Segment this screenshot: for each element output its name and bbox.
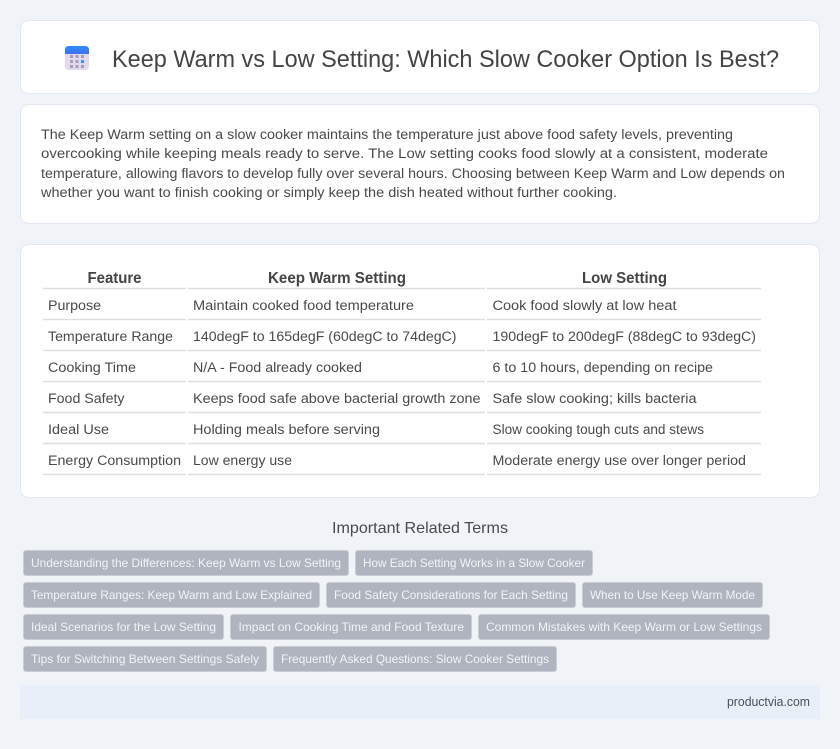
table row: cooking time: 6 to 10 hours, depending on recipe xyxy=(492,360,713,376)
tag: Temperature Ranges: Keep Warm and Low Explained xyxy=(31,588,312,602)
table row: purpose: Maintain cooked food temperature xyxy=(193,298,414,314)
tag: Food Safety Considerations for Each Setting xyxy=(334,588,568,602)
table header row: Low Setting xyxy=(582,270,667,287)
tag: Tips for Switching Between Settings Safely xyxy=(31,652,259,666)
tag xyxy=(274,646,556,672)
tag xyxy=(24,614,224,640)
tag xyxy=(582,582,762,608)
panel: title header xyxy=(20,20,820,94)
icon: calendar xyxy=(65,46,89,70)
table header row: Feature xyxy=(88,270,142,287)
table row: purpose xyxy=(48,298,677,314)
table row: cooking time: Cooking Time xyxy=(48,360,136,376)
table header row: Keep Warm Setting xyxy=(268,270,406,287)
table row: purpose: Purpose xyxy=(48,298,101,314)
tag xyxy=(230,614,472,640)
table row: ideal use xyxy=(48,422,704,438)
text block: introduction paragraph: temperature, allowing flavors to develop fully over several hours. Choosing between Keep Warm and Low depends on xyxy=(41,166,785,182)
table row: energy consumption: Low energy use xyxy=(193,453,292,469)
table row: ideal use: Slow cooking tough cuts and stews xyxy=(492,422,704,438)
table row: food safety xyxy=(48,391,697,407)
tag list: related terms xyxy=(24,550,770,672)
tag: How Each Setting Works in a Slow Cooker xyxy=(363,556,585,570)
title: Keep Warm vs Low Setting: Which Slow Cooker Option Is Best? xyxy=(112,46,779,73)
table row: energy consumption: Energy Consumption xyxy=(48,453,181,469)
table row: food safety: Safe slow cooking; kills bacteria xyxy=(492,391,697,407)
text block: introduction paragraph: The Keep Warm setting on a slow cooker maintains the temperature just above food safety levels, preventing xyxy=(41,127,733,143)
text block: introduction paragraph: overcooking while keeping meals ready to serve. The Low setting cooks food slowly at a consistent, moderate xyxy=(41,146,768,162)
table row: temperature range: 140degF to 165degF (60degC to 74degC) xyxy=(193,329,456,345)
tag: Understanding the Differences: Keep Warm vs Low Setting xyxy=(31,556,341,570)
tag xyxy=(24,646,266,672)
tag: Frequently Asked Questions: Slow Cooker Settings xyxy=(281,652,549,666)
tag: When to Use Keep Warm Mode xyxy=(590,588,755,602)
tag xyxy=(478,614,770,640)
table row: cooking time xyxy=(48,360,713,376)
heading: related terms: Important Related Terms xyxy=(332,520,508,537)
panel: introduction xyxy=(20,104,820,224)
table row: energy consumption xyxy=(48,453,746,469)
footer bar xyxy=(20,685,820,719)
table row: cooking time: N/A - Food already cooked xyxy=(193,360,362,376)
tag xyxy=(24,582,320,608)
table header row xyxy=(88,270,667,287)
table row: food safety: Keeps food safe above bacterial growth zone xyxy=(193,391,481,407)
panel: comparison table xyxy=(20,244,820,498)
table row: ideal use: Holding meals before serving xyxy=(193,422,380,438)
table row: ideal use: Ideal Use xyxy=(48,422,109,438)
tag: Ideal Scenarios for the Low Setting xyxy=(31,620,216,634)
tag: Common Mistakes with Keep Warm or Low Settings xyxy=(486,620,762,634)
footer source text: productvia.com xyxy=(727,695,810,709)
tag xyxy=(326,582,576,608)
table row: temperature range: 190degF to 200degF (88degC to 93degC) xyxy=(492,329,756,345)
table row: food safety: Food Safety xyxy=(48,391,125,407)
tag xyxy=(24,550,348,576)
text block: introduction paragraph xyxy=(40,127,785,201)
table row: energy consumption: Moderate energy use over longer period xyxy=(492,453,746,469)
tag: Impact on Cooking Time and Food Texture xyxy=(238,620,464,634)
table row: purpose: Cook food slowly at low heat xyxy=(492,298,677,314)
table row: temperature range xyxy=(48,329,756,345)
text block: introduction paragraph: whether you want to finish cooking or simply keep the dish heated without further cooking. xyxy=(40,185,617,201)
tag xyxy=(356,550,592,576)
table row: temperature range: Temperature Range xyxy=(48,329,173,345)
